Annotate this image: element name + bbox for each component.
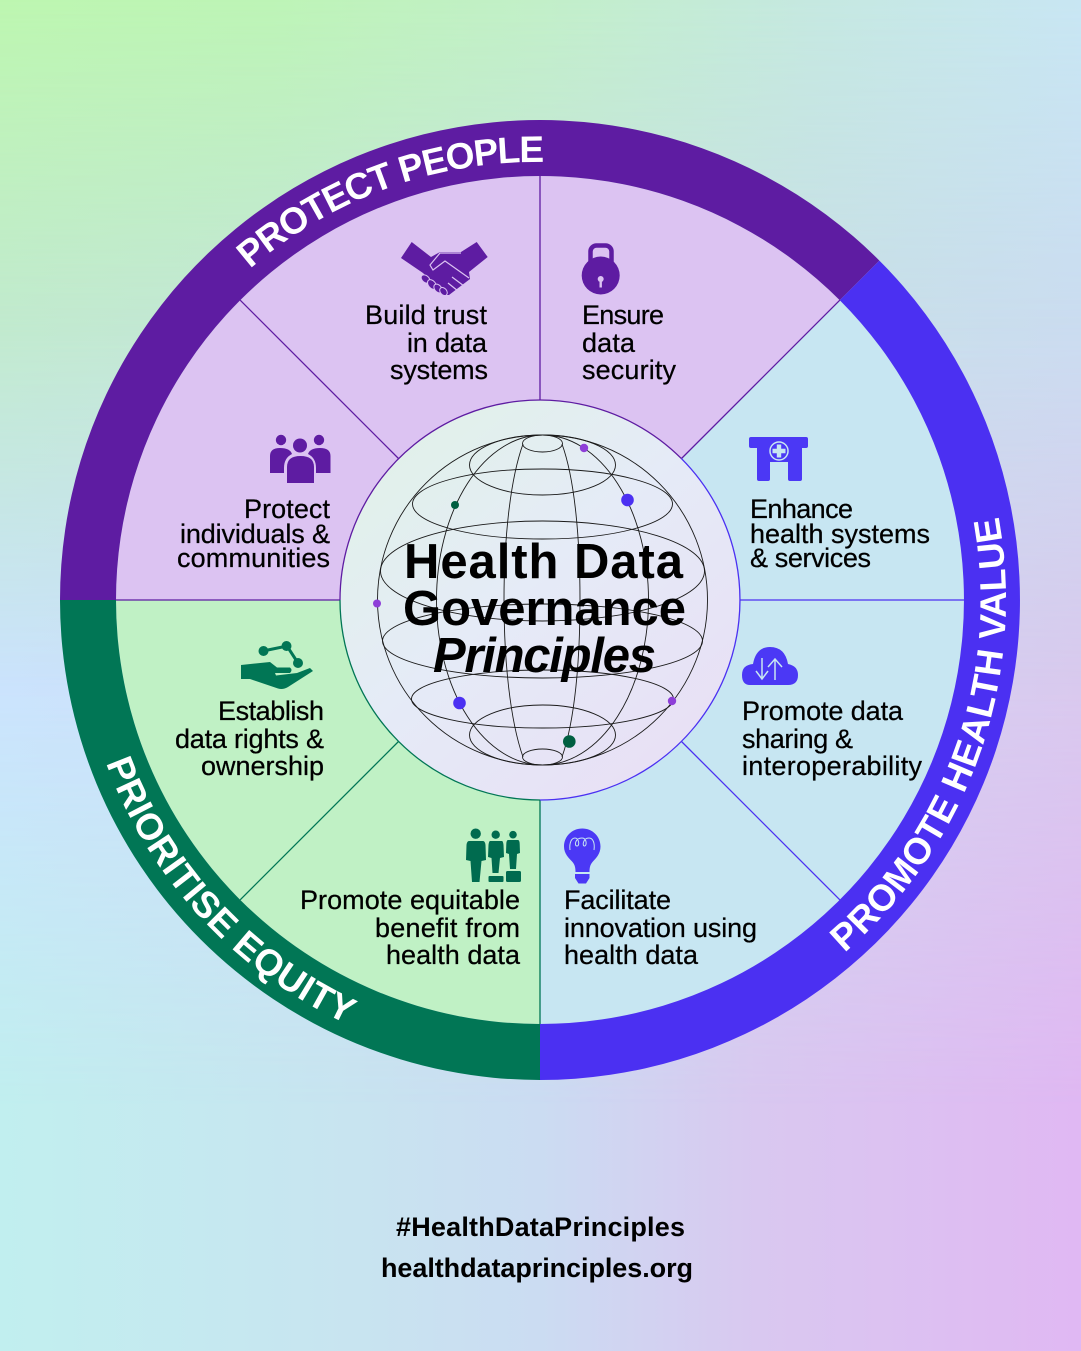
text: promote equitable benefit: health data: [386, 940, 521, 970]
text: protect individuals: individuals &: [180, 519, 330, 549]
text: enhance health systems: & services: [750, 543, 871, 573]
text: promote equitable benefit: Promote equitable: [300, 885, 520, 915]
title: Health Data: [404, 535, 684, 589]
text: protect individuals: [177, 494, 330, 573]
footer: hashtag and website: #HealthDataPrinciples: [396, 1212, 685, 1242]
text: facilitate innovation: Facilitate: [564, 885, 671, 915]
title: Principles: [433, 629, 656, 683]
ring label: prioritise equity: PRIORITISE EQUITY: [106, 756, 358, 1020]
panel: protect people sector: [116, 176, 840, 600]
icon: light bulb: [564, 828, 600, 884]
central globe hub: [340, 400, 740, 800]
icon: hospital: [749, 437, 808, 481]
text: facilitate innovation: [564, 885, 757, 970]
icon: handshake: [401, 242, 488, 297]
text: ensure data security: Ensure: [582, 300, 664, 330]
text: facilitate innovation: innovation using: [564, 913, 757, 943]
text: establish data rights: data rights &: [175, 724, 324, 754]
text: build trust: [365, 300, 488, 385]
text: establish data rights: ownership: [201, 751, 324, 781]
text: promote data sharing: Promote data: [742, 696, 904, 726]
title: Governance: [403, 582, 686, 636]
panel: promote health value sector: [540, 300, 964, 1024]
icon: cloud data exchange: [742, 647, 798, 685]
text: enhance health systems: health systems: [750, 519, 930, 549]
panel: prioritise equity sector: [116, 600, 540, 1024]
text: promote equitable benefit: [300, 885, 521, 970]
text: establish data rights: [175, 696, 324, 781]
text: promote equitable benefit: benefit from: [375, 913, 520, 943]
text: build trust: systems: [390, 355, 488, 385]
text: facilitate innovation: health data: [564, 940, 699, 970]
text: build trust: in data: [407, 328, 488, 358]
text: ensure data security: security: [582, 355, 676, 385]
globe wireframe: [378, 435, 708, 765]
text: promote data sharing: interoperability: [742, 751, 922, 781]
text: ensure data security: data: [582, 328, 636, 358]
ring: protect people: [60, 120, 879, 600]
icon: hand with network: [241, 641, 313, 689]
hub circle: [340, 400, 740, 800]
icon: people group: [270, 435, 330, 483]
ring label: protect people: PROTECT PEOPLE: [236, 136, 543, 268]
text: establish data rights: Establish: [218, 696, 324, 726]
ring label: promote health value: PROMOTE HEALTH VALUE: [829, 518, 1006, 952]
text: protect individuals: Protect: [244, 494, 330, 524]
text: enhance health systems: Enhance: [750, 494, 853, 524]
text: promote data sharing: sharing &: [742, 724, 853, 754]
principles wheel: [60, 120, 1020, 1080]
title: [403, 535, 686, 683]
globe dots: [373, 444, 676, 748]
footer: hashtag and website: [381, 1212, 693, 1283]
ring: prioritise equity: [60, 600, 540, 1080]
icon: equity figures: [466, 828, 521, 882]
text: build trust: Build trust: [365, 300, 487, 330]
ring: promote health value: [540, 261, 1020, 1080]
icon: padlock: [582, 246, 620, 294]
footer: hashtag and website: healthdataprinciples.org: [381, 1253, 693, 1283]
text: enhance health systems: [750, 494, 930, 573]
text: ensure data security: [582, 300, 676, 385]
text: protect individuals: communities: [177, 543, 330, 573]
text: promote data sharing: [742, 696, 922, 781]
